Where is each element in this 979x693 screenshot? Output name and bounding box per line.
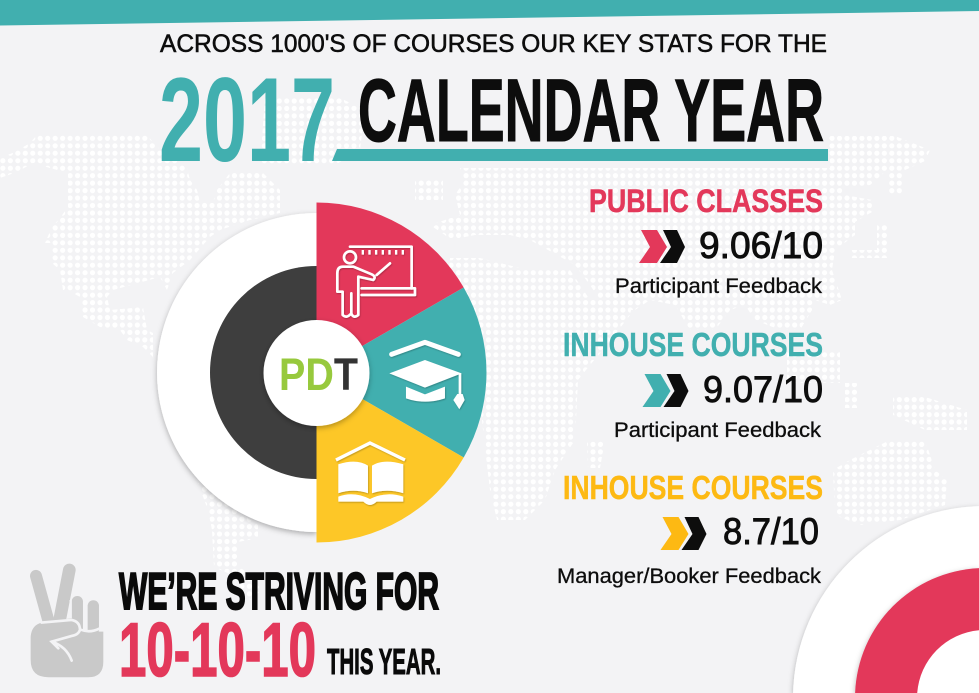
panel: inhouse courses manager stat <box>557 469 823 588</box>
chevrons <box>660 517 706 550</box>
bottom message 10-10-10: 10-10-10 <box>119 608 316 693</box>
heading: INHOUSE COURSES <box>563 469 823 506</box>
white half ring <box>157 213 316 532</box>
caption: Manager/Booker Feedback <box>557 565 822 588</box>
logo text PDT: PDT <box>279 349 358 400</box>
bottom message line 1: WE’RE STRIVING FOR <box>119 563 439 621</box>
title: year 2017: 2017 <box>159 53 335 187</box>
teal segment <box>316 288 486 458</box>
corner concentric rings <box>793 506 979 693</box>
bottom message this year: THIS YEAR. <box>327 641 441 682</box>
icon: teacher at board <box>337 247 415 317</box>
red segment <box>316 202 464 372</box>
chevrons <box>639 230 685 263</box>
caption: Participant Feedback <box>614 419 822 442</box>
icon: graduation cap <box>389 342 465 409</box>
heading: PUBLIC CLASSES <box>589 183 823 219</box>
score: 9.07/10 <box>703 369 823 410</box>
dark half ring <box>210 266 316 479</box>
chevrons <box>642 374 688 407</box>
panel: pie graphic <box>157 202 486 542</box>
yellow segment <box>316 372 464 542</box>
centre logo disc <box>264 320 370 426</box>
icon: open book <box>336 443 405 505</box>
title: intro line: ACROSS 1000'S OF COURSES OUR KEY STATS FOR THE <box>160 30 827 58</box>
icon: peace hand <box>31 570 103 677</box>
score: 8.7/10 <box>723 511 819 552</box>
heading: INHOUSE COURSES <box>563 326 823 363</box>
caption: Participant Feedback <box>615 275 823 298</box>
score: 9.06/10 <box>699 225 823 266</box>
dotted world map <box>3 94 979 601</box>
title underline bar <box>332 149 828 161</box>
panel: inhouse courses participant stat <box>563 326 823 442</box>
panel: public classes stat <box>589 183 823 298</box>
top teal band <box>0 0 979 26</box>
